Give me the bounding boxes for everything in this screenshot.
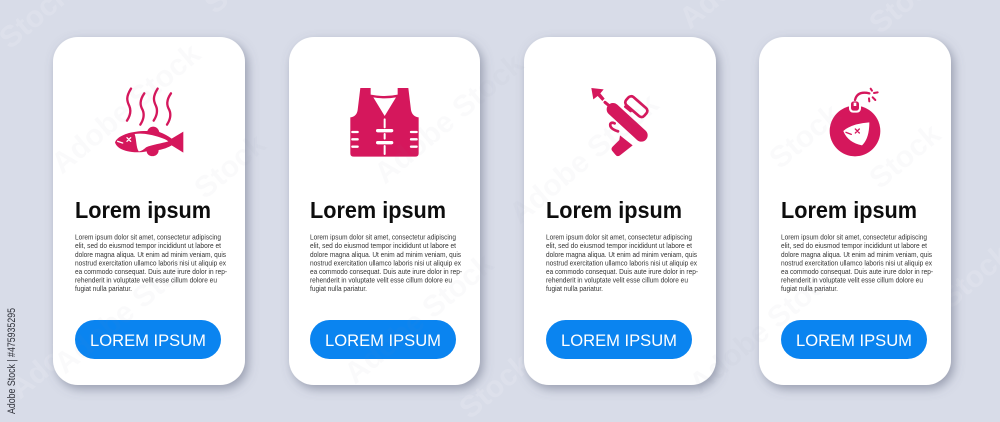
text block: nostrud exercitation ullamco laboris nisi ut aliquip ex <box>781 258 932 267</box>
text block: fugiat nulla pariatur. <box>310 284 367 293</box>
text block: rehenderit in voluptate velit esse cillum dolore eu <box>781 276 923 284</box>
text block: dolore magna aliqua. Ut enim ad minim veniam, quis <box>75 250 226 259</box>
card watermarks: Adobe Stock <box>48 237 210 380</box>
background watermarks: Adobe <box>3 320 96 405</box>
text block: nostrud exercitation ullamco laboris nisi ut aliquip ex <box>310 258 461 267</box>
text block <box>781 233 933 293</box>
panel: card 3 <box>524 37 716 385</box>
text block: dolore magna aliqua. Ut enim ad minim veniam, quis <box>310 250 461 259</box>
text block: Lorem ipsum dolor sit amet, consectetur adipiscing <box>310 233 456 242</box>
text block: ea commodo consequat. Duis aute irure dolor in rep- <box>310 267 462 276</box>
button <box>546 320 692 359</box>
text block <box>546 233 698 293</box>
icon: fish bomb <box>830 89 880 156</box>
button: LOREM IPSUM <box>90 331 206 350</box>
card watermarks: Stock <box>863 117 947 195</box>
panel: card 4 <box>759 37 951 385</box>
text block: nostrud exercitation ullamco laboris nisi ut aliquip ex <box>546 258 697 267</box>
text block: rehenderit in voluptate velit esse cillum dolore eu <box>310 276 452 284</box>
button: LOREM IPSUM <box>325 331 441 350</box>
text block: rehenderit in voluptate velit esse cillum dolore eu <box>75 276 217 284</box>
button: LOREM IPSUM <box>796 331 912 350</box>
card watermarks: Stock <box>188 127 272 205</box>
text block: fugiat nulla pariatur. <box>546 284 603 293</box>
text block: fugiat nulla pariatur. <box>781 284 838 293</box>
text block: elit, sed do eiusmod tempor incididunt ut labore et <box>75 241 222 250</box>
button <box>310 320 456 359</box>
icon: spoiled fish with odor <box>115 89 183 156</box>
button: LOREM IPSUM <box>561 331 677 350</box>
text block: ea commodo consequat. Duis aute irure dolor in rep- <box>546 267 698 276</box>
heading: Lorem ipsum <box>310 197 446 223</box>
card watermarks: Adobe Stock <box>338 247 500 390</box>
heading: Lorem ipsum <box>781 197 917 223</box>
card watermarks: Adobe Stock <box>503 87 665 230</box>
text block: dolore magna aliqua. Ut enim ad minim veniam, quis <box>546 250 697 259</box>
button <box>781 320 927 359</box>
text block <box>75 233 227 293</box>
text block: dolore magna aliqua. Ut enim ad minim veniam, quis <box>781 250 932 259</box>
card watermarks: Adobe Stock <box>368 47 530 190</box>
card watermarks: Adobe Stock <box>45 37 207 180</box>
button <box>75 320 221 359</box>
panel: card 2 <box>289 37 480 385</box>
text block: Lorem ipsum dolor sit amet, consectetur adipiscing <box>75 233 221 242</box>
text block: ea commodo consequat. Duis aute irure dolor in rep- <box>75 267 227 276</box>
text block: fugiat nulla pariatur. <box>75 284 132 293</box>
stock id label: Adobe Stock | #475935295 <box>6 308 18 414</box>
text block: nostrud exercitation ullamco laboris nisi ut aliquip ex <box>75 258 226 267</box>
text block: Lorem ipsum dolor sit amet, consectetur adipiscing <box>546 233 692 242</box>
text block: elit, sed do eiusmod tempor incididunt ut labore et <box>310 241 457 250</box>
card watermarks: Adobe Stock <box>683 257 845 400</box>
text block: elit, sed do eiusmod tempor incididunt ut labore et <box>781 241 928 250</box>
text block: ea commodo consequat. Duis aute irure dolor in rep- <box>781 267 933 276</box>
heading: Lorem ipsum <box>546 197 682 223</box>
text block: Lorem ipsum dolor sit amet, consectetur adipiscing <box>781 233 927 242</box>
icon: harpoon gun <box>591 88 649 156</box>
icon: life vest <box>350 88 419 157</box>
card watermarks <box>45 37 947 400</box>
text block: rehenderit in voluptate velit esse cillum dolore eu <box>546 276 688 284</box>
heading: Lorem ipsum <box>75 197 211 223</box>
card watermarks: Stock <box>763 97 847 175</box>
text block: elit, sed do eiusmod tempor incididunt ut labore et <box>546 241 693 250</box>
text block <box>310 233 462 293</box>
panel: card 1 <box>53 37 245 385</box>
